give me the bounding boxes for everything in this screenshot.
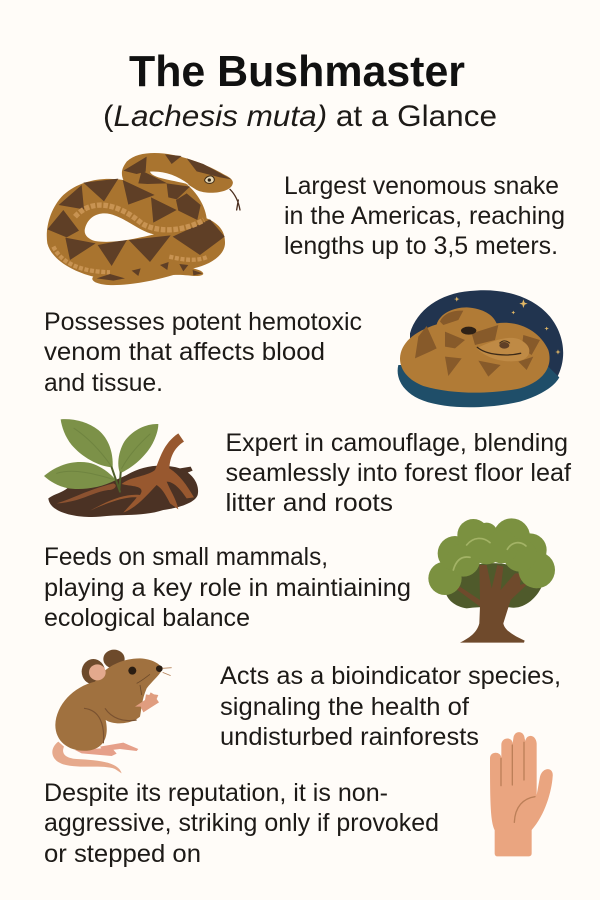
text: feeds on small mammals: [44, 543, 411, 632]
text: feeds on small mammals: Feeds on small mammals,: [44, 543, 328, 571]
text: feeds on small mammals: ecological balance: [44, 604, 250, 632]
text: non-aggressive: or stepped on: [44, 840, 201, 868]
text: expert in camouflage: litter and roots: [226, 489, 393, 517]
text: hemotoxic venom: Possesses potent hemotoxic: [44, 308, 362, 336]
text: bioindicator species: signaling the health of: [220, 693, 469, 721]
icon: raised hand: [490, 732, 553, 856]
text: hemotoxic venom: venom that affects blood: [44, 338, 325, 366]
text: expert in camouflage: Expert in camouflage, blending: [226, 429, 568, 457]
text: non-aggressive: [44, 779, 439, 868]
text: largest venomous snake: [284, 172, 565, 260]
title: The Bushmaster: [129, 47, 465, 96]
text: non-aggressive: aggressive, striking only if provoked: [44, 809, 439, 837]
text: largest venomous snake: Largest venomous snake: [284, 172, 559, 200]
text: hemotoxic venom: [44, 308, 362, 397]
icon: snake coiled at night: [398, 290, 563, 407]
icon: tree: [428, 518, 555, 643]
text: expert in camouflage: [226, 429, 571, 517]
title: [103, 47, 497, 133]
icon: leaves, soil and roots: [44, 419, 198, 517]
icon: mouse: [52, 650, 172, 773]
text: bioindicator species: Acts as a bioindicator species,: [220, 662, 561, 690]
text: largest venomous snake: in the Americas, reaching: [284, 202, 565, 230]
text: expert in camouflage: seamlessly into forest floor leaf: [226, 459, 571, 487]
text: hemotoxic venom: and tissue.: [44, 369, 163, 397]
text: largest venomous snake: lengths up to 3,5 meters.: [284, 232, 558, 260]
title: (Lachesis muta) at a Glance: [103, 100, 497, 133]
text: feeds on small mammals: playing a key role in maintiaining: [44, 574, 411, 602]
text: bioindicator species: undisturbed rainforests: [220, 723, 479, 751]
icon: coiled bushmaster snake: [47, 153, 240, 285]
text: bioindicator species: [220, 662, 561, 751]
text: non-aggressive: Despite its reputation, it is non-: [44, 779, 388, 807]
